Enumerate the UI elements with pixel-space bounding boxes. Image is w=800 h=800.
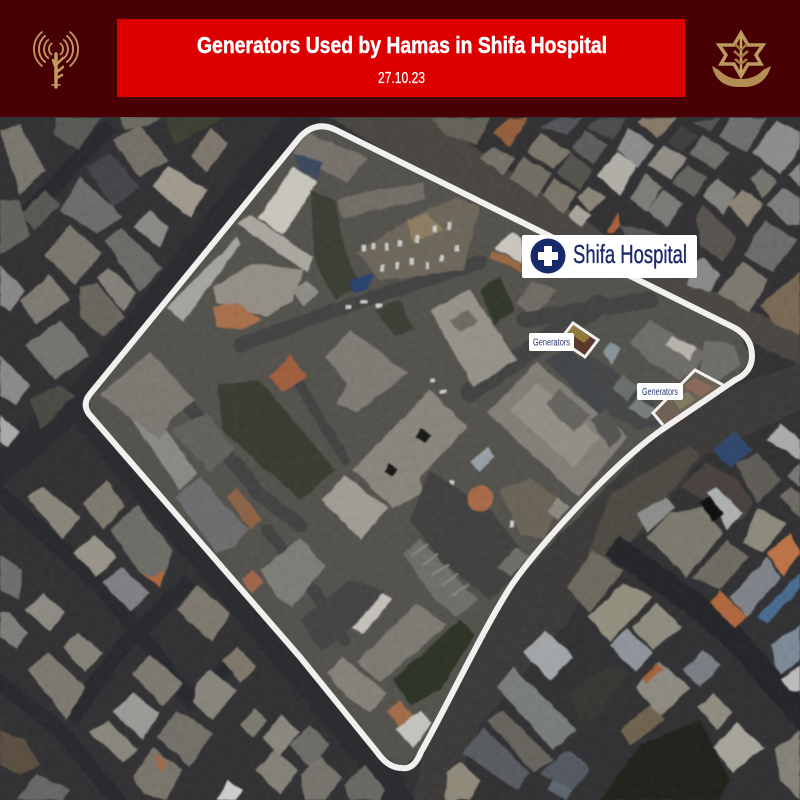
buildings: south compound [242,497,570,748]
road: western streets [0,125,235,800]
buildings: north-east neighbourhood [430,118,800,335]
date: 27.10.23 [378,70,425,87]
buildings: south neighbourhood [445,630,590,800]
buildings: south-east neighbourhood [548,423,800,800]
road: cross street [612,545,800,725]
icon: star emblem with sword and branch [712,33,771,87]
parked cars [345,222,514,542]
title banner [117,19,685,97]
buildings: west compound [100,352,262,553]
title: Generators Used by Hamas in Shifa Hospital [197,32,607,58]
road: north-east street [330,117,800,365]
icon: medical cross [530,238,566,274]
ground: hospital compound [89,126,752,768]
buildings: north-west neighbourhood [0,117,228,447]
icon: signal antenna emblem [34,32,78,87]
label: Generators 2: Generators [642,387,678,398]
buildings: south-west neighbourhood [0,480,257,800]
road: north-west street [0,107,310,478]
label: Shifa Hospital: Shifa Hospital [573,239,687,269]
building: large hospital block [487,362,628,497]
buildings: central compound [218,280,560,600]
ground: tan verge beside south-east street [575,445,700,590]
roof ribs: south compound [412,544,468,596]
road: south-east main street [410,360,800,800]
label: Generators 1 [529,333,574,351]
generators area 1 [560,323,598,357]
buildings: north-east compound [545,320,740,430]
roads inside compound [180,262,650,640]
label: Shifa Hospital [522,235,697,278]
building cluster: south-centre [240,708,385,800]
buildings: north compound [167,133,522,335]
label: Generators 2 [637,383,683,400]
hospital boundary outline [86,126,752,768]
generators area 2 [653,370,723,425]
label: Generators 1: Generators [533,338,570,348]
road: south-west street [85,415,405,800]
header band [0,0,800,117]
